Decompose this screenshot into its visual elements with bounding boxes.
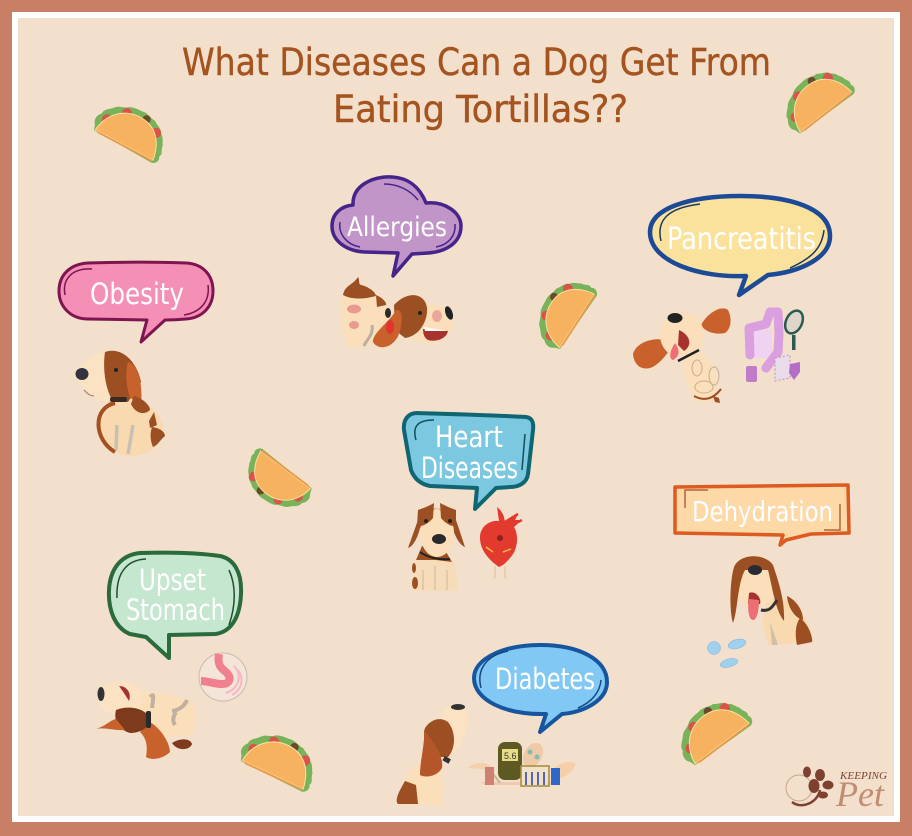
logo: Keeping Pet	[786, 766, 887, 814]
icon: taco top left	[89, 93, 175, 165]
speech bubble: Obesity: Obesity	[90, 277, 184, 311]
dog: Heart Diseases	[408, 503, 465, 591]
speech bubble: Diabetes: Diabetes	[495, 662, 595, 696]
icon: stomach	[199, 653, 247, 701]
icon: heart character	[480, 507, 522, 578]
speech bubble: Pancreatitis	[650, 196, 830, 295]
speech bubble: Pancreatitis: Pancreatitis	[667, 222, 816, 257]
speech bubble: Upset Stomach: Upset	[139, 563, 206, 597]
icon: taco left centre	[235, 446, 316, 521]
logo: Keeping Pet: KEEPING	[839, 771, 887, 782]
icon: glucose meter and medicine: 5.6	[504, 751, 517, 761]
speech bubble: Heart Diseases	[404, 413, 533, 509]
dog: Obesity	[76, 351, 165, 456]
dog: Dehydration	[730, 556, 813, 645]
speech bubble: Upset Stomach: Stomach	[126, 593, 225, 627]
speech bubble: Heart Diseases: Diseases	[421, 451, 518, 485]
dog: Upset Stomach	[95, 681, 196, 759]
icon: taco centre	[525, 270, 599, 353]
icon: intestines and magnifier	[746, 308, 806, 382]
icon: taco bottom left	[236, 722, 325, 794]
title: Eating Tortillas??	[333, 88, 628, 131]
speech bubble: Diabetes	[474, 645, 607, 732]
icon: taco top right	[772, 59, 857, 137]
logo: Keeping Pet: Pet	[835, 774, 885, 814]
icon: taco bottom right	[667, 688, 755, 769]
icon: glucose meter and medicine	[468, 739, 576, 786]
dog: Diabetes	[397, 704, 468, 805]
dog: Allergies	[341, 277, 455, 348]
icon: water drops	[708, 637, 747, 669]
title: What Diseases Can a Dog Get From	[182, 41, 771, 84]
title	[182, 41, 771, 131]
dog: Pancreatitis	[633, 308, 731, 407]
speech bubble: Heart Diseases: Heart	[435, 420, 503, 454]
speech bubble: Allergies: Allergies	[347, 212, 447, 243]
speech bubble: Dehydration	[675, 485, 849, 545]
speech bubble: Obesity	[59, 262, 213, 342]
speech bubble: Upset Stomach	[109, 553, 241, 658]
speech bubble: Dehydration: Dehydration	[692, 495, 833, 528]
speech bubble: Allergies	[332, 177, 461, 276]
